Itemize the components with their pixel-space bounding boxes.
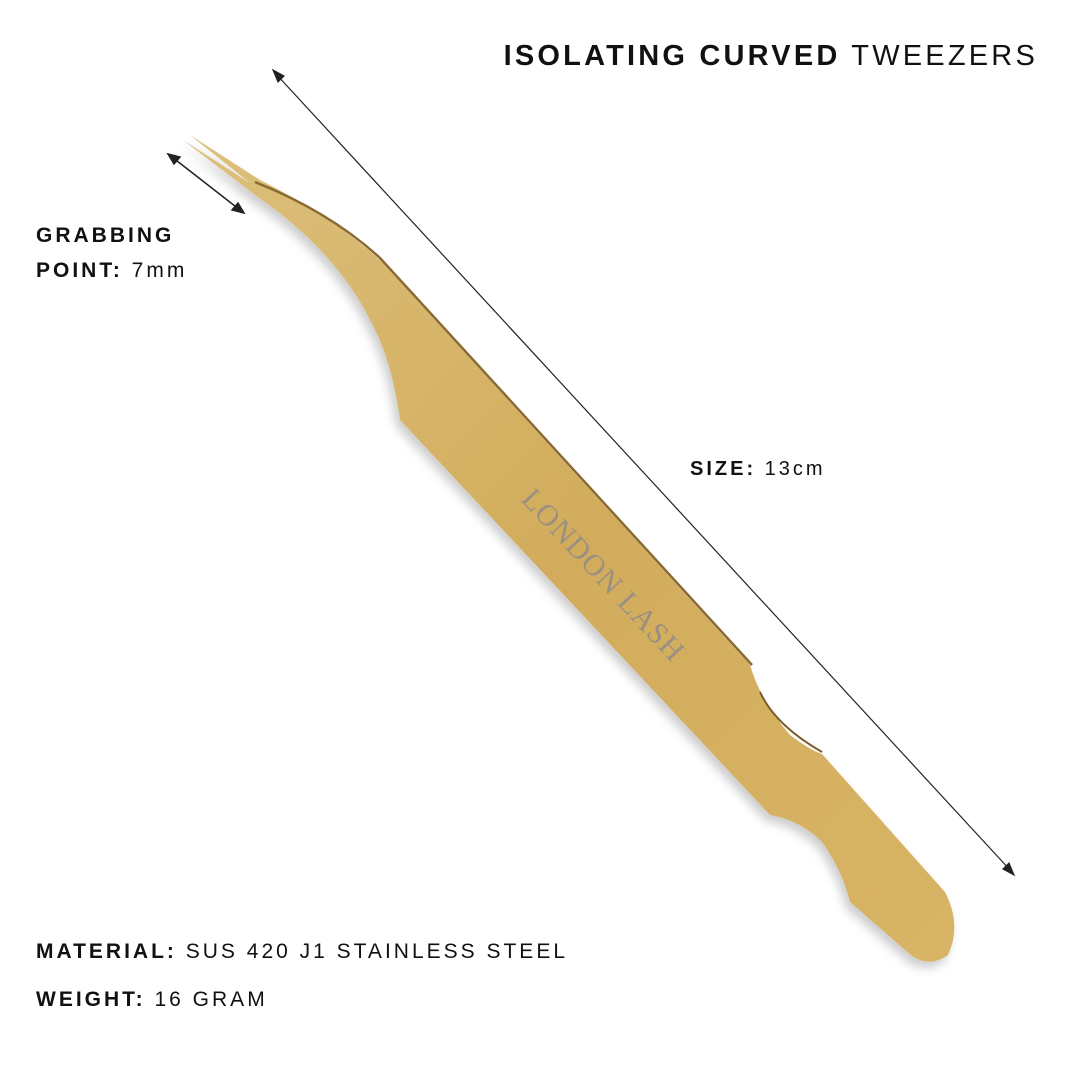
arrow: size bbox=[273, 70, 1014, 875]
label: grabbing point bbox=[36, 224, 187, 282]
brand text: LONDON LASH bbox=[515, 482, 691, 668]
label: grabbing point: POINT: 7mm bbox=[36, 259, 187, 282]
label: size: SIZE: 13cm bbox=[690, 458, 826, 480]
title: ISOLATING CURVED TWEEZERS bbox=[504, 40, 1038, 72]
arrow: grabbing point bbox=[168, 154, 244, 213]
label: grabbing point: GRABBING bbox=[36, 224, 174, 247]
label: weight: WEIGHT: 16 GRAM bbox=[36, 988, 268, 1011]
label: material: MATERIAL: SUS 420 J1 STAINLESS STEEL bbox=[36, 940, 568, 963]
